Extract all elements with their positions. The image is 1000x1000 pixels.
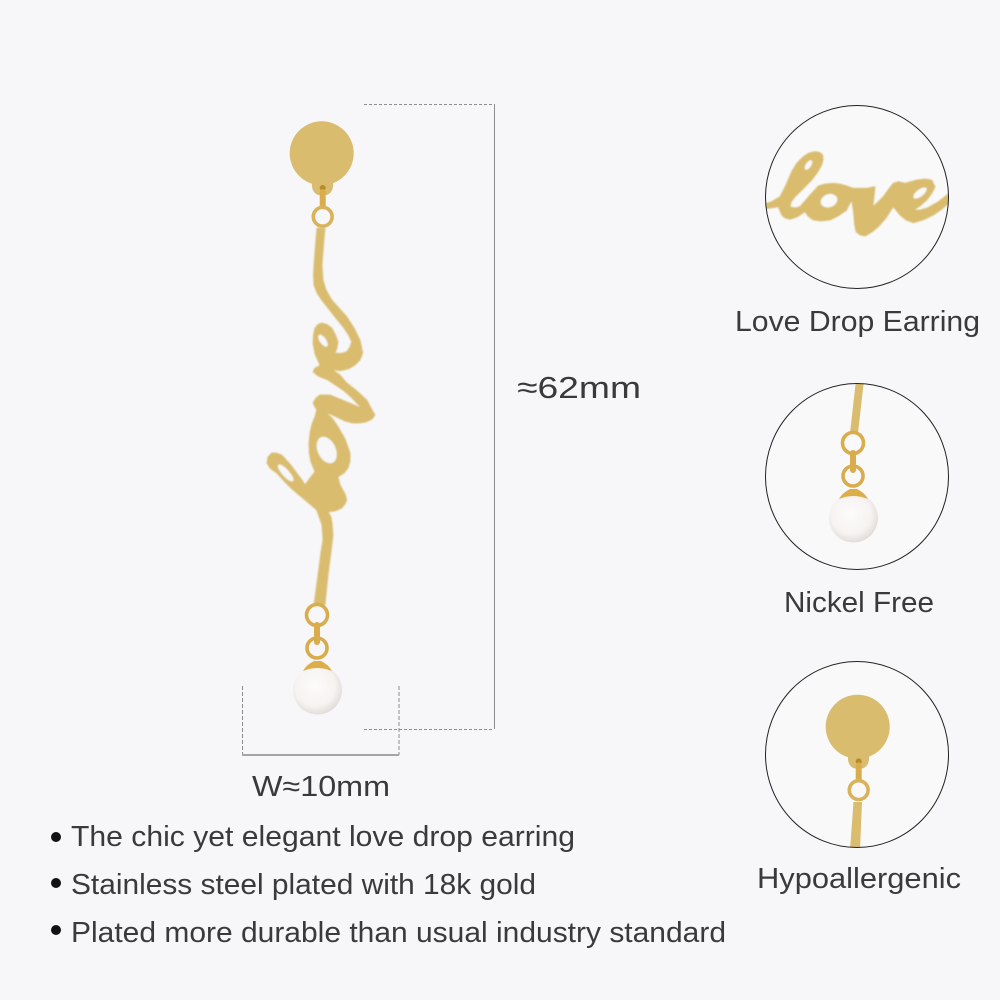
bullet 2: Stainless steel plated with 18k gold [71, 869, 536, 901]
feature list [51, 821, 726, 949]
bullet 3: Plated more durable than usual industry standard [71, 917, 726, 949]
label: Love Drop Earring: Love Drop Earring [735, 306, 980, 338]
letter counters [316, 333, 330, 348]
detail circle: love [760, 106, 955, 288]
dimension: height [364, 104, 494, 730]
detail circle: stud [766, 662, 948, 850]
love counters [803, 159, 814, 171]
detail circle: pearl [766, 380, 948, 570]
earring product photo [267, 121, 375, 715]
width label: W≈10mm [252, 771, 390, 803]
bullet 1: The chic yet elegant love drop earring [71, 821, 575, 853]
height label: ≈62mm [517, 370, 641, 405]
label: Nickel Free: Nickel Free [784, 587, 934, 619]
earring stud disc and top links [290, 121, 354, 226]
dimension: width [242, 686, 399, 755]
pearl drop [293, 604, 342, 714]
label: Hypoallergenic: Hypoallergenic [757, 863, 961, 895]
love script wire [267, 228, 375, 605]
